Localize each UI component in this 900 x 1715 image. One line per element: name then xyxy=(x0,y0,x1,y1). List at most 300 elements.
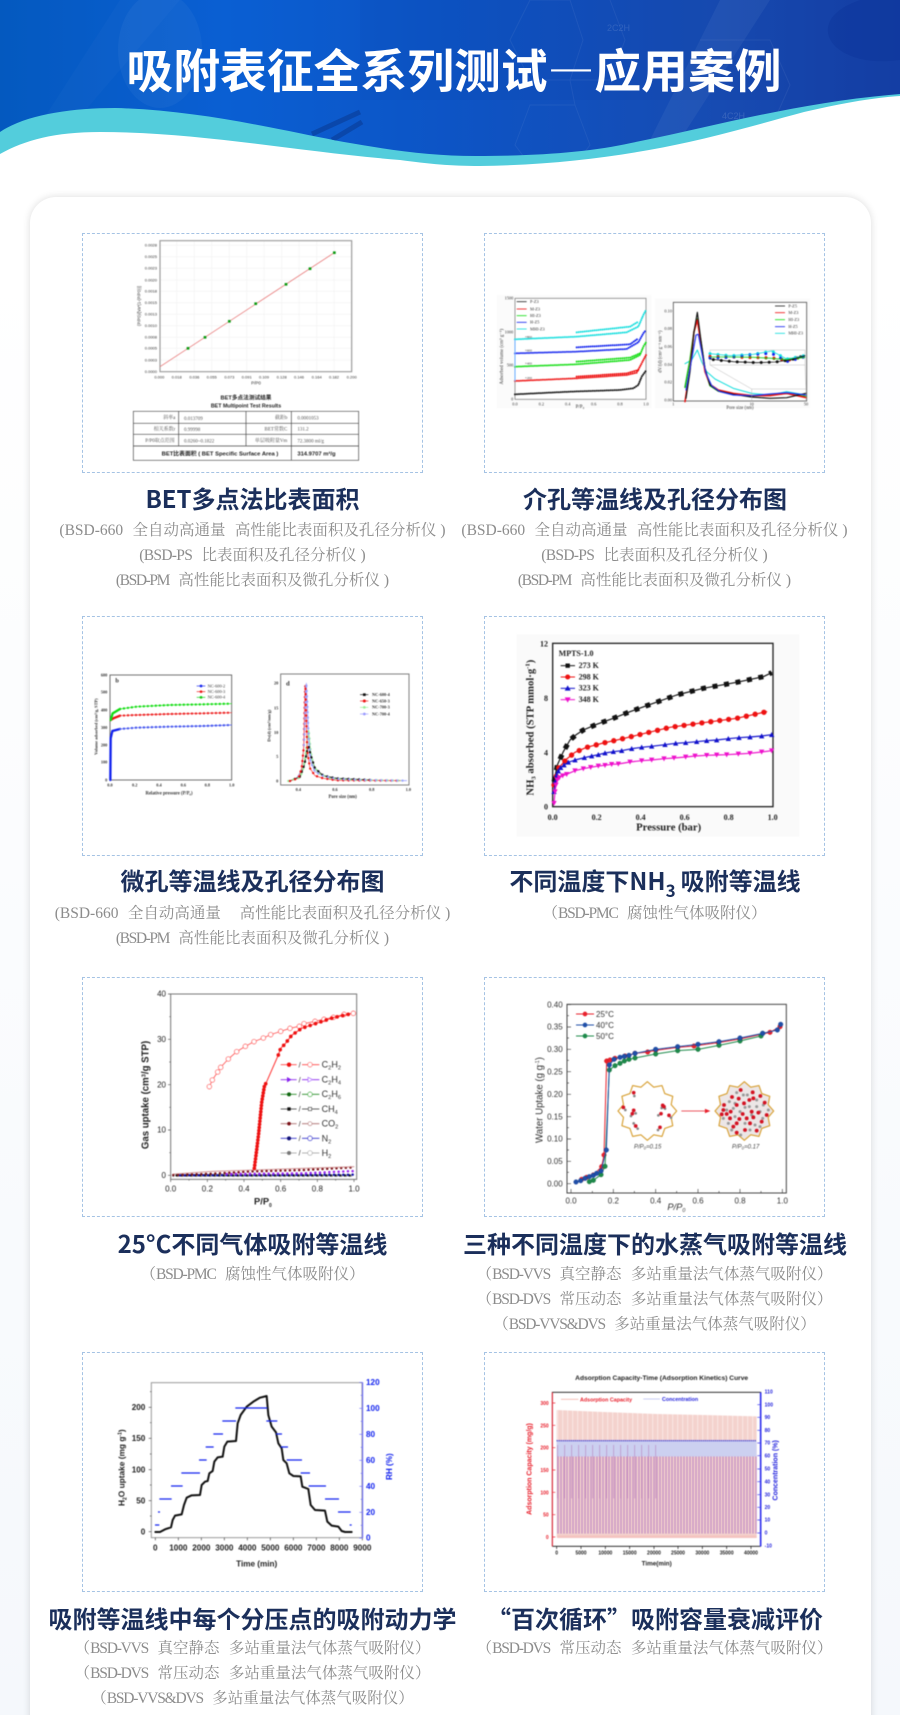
left labels and legend: 0 xyxy=(105,777,107,782)
axis labels: 0.20 xyxy=(547,1090,563,1099)
x axis labels: 5000 xyxy=(575,1550,587,1556)
legend: CO xyxy=(322,1119,335,1129)
NH3 labels: 0.8 xyxy=(724,813,734,822)
axis labels: 5000 xyxy=(261,1543,280,1552)
left axis labels: Adsorption Capacity (mg/g) xyxy=(526,1423,533,1515)
right chart labels and legend: 0.06 xyxy=(664,344,673,349)
right chart labels and legend: 1 xyxy=(672,401,674,406)
axis labels: 100 xyxy=(132,1465,146,1474)
axis labels: 0.8 xyxy=(312,1185,323,1194)
x axis labels: 15000 xyxy=(623,1550,637,1556)
axis labels: 0.2 xyxy=(608,1197,619,1206)
left legend: H-Z5 xyxy=(530,320,539,325)
right labels and legend: NC-600-4 xyxy=(372,692,391,697)
axis labels: 0.05 xyxy=(547,1157,563,1166)
right axis labels: 20 xyxy=(765,1505,770,1511)
right axis labels: 50 xyxy=(765,1467,770,1473)
right labels and legend: Dv(d) (cm³/nm/g) xyxy=(267,709,272,742)
chart: gas uptake at 25C xyxy=(140,990,360,1209)
right axis labels: 70 xyxy=(765,1441,770,1447)
right axis labels xyxy=(765,1390,779,1549)
NH3 labels: 0.6 xyxy=(680,813,690,822)
legend: 25°C xyxy=(596,1010,614,1019)
axis labels: 0.15 xyxy=(547,1112,563,1121)
instruments: mesopore: (BSD-PS 比表面积及孔径分析仪 ) xyxy=(541,547,768,564)
instruments: mesopore xyxy=(461,522,848,589)
RH axis labels: 60 xyxy=(366,1456,376,1465)
instruments: kinetics: （BSD-VVS 真空静态 多站重量法气体蒸气吸附仪） xyxy=(75,1640,430,1656)
axis labels: 0.25 xyxy=(547,1067,563,1076)
right chart labels and legend: 0.08 xyxy=(664,326,672,331)
axis labels: Time (min) xyxy=(236,1559,277,1568)
right chart labels and legend: dV/(d) (cm³ g⁻¹ nm⁻¹) xyxy=(657,330,663,373)
right axis labels: 10 xyxy=(765,1518,770,1524)
left chart labels: +400 xyxy=(525,362,532,366)
chart: BET line and results table xyxy=(132,240,360,462)
axis labels: 6000 xyxy=(284,1543,303,1552)
left labels and legend: 400 xyxy=(101,707,107,712)
title: gases: 25°C不同气体吸附等温线 xyxy=(118,1225,387,1260)
results table: 0.0260~0.1822 xyxy=(184,439,215,444)
axis labels: 0.0018 xyxy=(145,289,158,294)
left axis labels: 0 xyxy=(546,1535,549,1541)
legend xyxy=(281,1060,341,1160)
header banner with wave xyxy=(0,0,900,166)
left labels and legend: 300 xyxy=(101,725,107,730)
axis labels: 0 xyxy=(141,1527,146,1536)
axis labels: 4000 xyxy=(238,1543,257,1552)
axis labels: 20 xyxy=(157,1080,167,1089)
legend: C xyxy=(322,1060,328,1070)
instruments: hundred cycles: （BSD-DVS 常压动态 多站重量法气体蒸气吸附仪） xyxy=(477,1640,832,1656)
RH axis labels: 0 xyxy=(366,1534,371,1543)
panel: water vapour isotherm xyxy=(484,977,825,1217)
right labels and legend: 15 xyxy=(274,706,278,711)
axis labels: 0.091 xyxy=(242,374,252,379)
x axis labels: 25000 xyxy=(671,1550,685,1556)
title: water vapour: 三种不同温度下的水蒸气吸附等温线 xyxy=(463,1225,847,1260)
legend: 2 xyxy=(338,1066,341,1072)
legend: Adsorption Capacity xyxy=(580,1398,632,1404)
NH3 labels: 12 xyxy=(540,639,548,648)
low uptake gas curves xyxy=(173,1167,354,1176)
right labels and legend: 1.0 xyxy=(406,787,411,792)
results table: P/P0取点范围 xyxy=(145,437,175,444)
left labels and legend: NC-600-4 xyxy=(208,695,226,700)
chart: micropore isotherm and pore size xyxy=(93,672,412,800)
right labels and legend: NC-650-3 xyxy=(372,698,391,703)
left chart labels: +800 xyxy=(525,335,532,339)
legend: H xyxy=(331,1089,338,1099)
legend: 4 xyxy=(338,1080,341,1086)
left labels and legend: NC-600-3 xyxy=(208,689,225,694)
axis labels: 0.4 xyxy=(238,1185,250,1194)
instruments: micropore: (BSD-660 全自动高通量 高性能比表面积及孔径分析仪 ) xyxy=(55,904,450,922)
right chart labels and legend: Pore size (nm) xyxy=(726,406,754,411)
panel: gases at 25C xyxy=(82,977,423,1217)
legend: 2 xyxy=(328,1139,331,1145)
left chart labels: 0.4 xyxy=(565,401,571,406)
legend xyxy=(561,1397,698,1404)
panel: kinetics at each partial pressure xyxy=(82,1352,423,1592)
axis labels: 0.018 xyxy=(172,374,182,379)
axis labels: 0.182 xyxy=(329,374,340,379)
legend xyxy=(576,1010,614,1041)
x axis labels: Time(min) xyxy=(642,1561,672,1568)
axis labels: 0.200 xyxy=(347,374,357,379)
legend: / xyxy=(299,1060,302,1069)
right chart labels and legend xyxy=(657,303,808,411)
axis labels: 2 xyxy=(122,1497,128,1500)
axis labels: 0.0010 xyxy=(145,323,158,328)
left chart labels: 0.2 xyxy=(539,401,544,406)
pore inset after filling xyxy=(715,1082,774,1151)
axis labels: 0 xyxy=(682,1208,685,1214)
legend: 40°C xyxy=(596,1021,614,1030)
legend: 2 xyxy=(328,1154,331,1160)
NH3 labels xyxy=(524,639,778,834)
results table: 131.2 xyxy=(297,428,309,433)
right chart labels and legend: 0.02 xyxy=(664,380,672,385)
left legend xyxy=(517,299,545,331)
instruments: kinetics: （BSD-DVS 常压动态 多站重量法气体蒸气吸附仪） xyxy=(75,1665,430,1682)
NH3 labels: ) xyxy=(525,659,536,663)
axis labels: 0.073 xyxy=(224,374,235,379)
axis labels: 0.164 xyxy=(312,374,322,379)
legend: / xyxy=(299,1075,302,1084)
instruments: gases: （BSD-PMC 腐蚀性气体吸附仪） xyxy=(140,1266,365,1282)
instruments: NH3: （BSD-PMC 腐蚀性气体吸附仪） xyxy=(542,904,767,922)
axis labels: 0.146 xyxy=(294,374,305,379)
right chart labels and legend: 0.00 xyxy=(664,398,672,403)
left axis labels: 100 xyxy=(540,1490,549,1496)
axis labels: 1000 xyxy=(169,1543,188,1552)
right labels and legend: Pore size (nm) xyxy=(328,795,357,800)
right chart labels and legend: HI-Z3 xyxy=(788,317,799,322)
x axis labels: 35000 xyxy=(720,1550,734,1556)
instruments: kinetics: （BSD-VVS&DVS 多站重量法气体蒸气吸附仪） xyxy=(91,1690,414,1707)
right axis labels: 110 xyxy=(765,1390,773,1396)
left labels and legend xyxy=(93,672,234,797)
NH3 curves xyxy=(554,673,772,803)
RH axis labels: 80 xyxy=(366,1430,376,1439)
NH3 labels: 0.2 xyxy=(592,813,602,822)
arrow between insets xyxy=(681,1109,709,1113)
axis labels: 0.0015 xyxy=(145,300,158,305)
left chart labels xyxy=(499,296,649,410)
axis labels: 0.6 xyxy=(275,1185,287,1194)
NH3 labels: 0.4 xyxy=(636,813,646,822)
axis labels: 0.0000 xyxy=(145,369,158,374)
right axis labels: 80 xyxy=(765,1428,770,1434)
left chart labels: +200 xyxy=(525,376,532,380)
axis labels: 0.055 xyxy=(207,374,217,379)
pore inset before filling: P/P₀=0.15 xyxy=(634,1145,662,1151)
legend: / xyxy=(299,1119,302,1128)
axis labels: 7000 xyxy=(307,1543,326,1552)
RH steps xyxy=(155,1408,352,1525)
NH3 labels: NH xyxy=(525,780,536,796)
legend: 2 xyxy=(335,1125,338,1131)
axis labels: 0.6 xyxy=(692,1197,704,1206)
axis labels: ) xyxy=(117,1429,127,1432)
axis labels: 0.0020 xyxy=(145,277,158,282)
left axis labels: 250 xyxy=(540,1423,549,1429)
axis labels: 0.036 xyxy=(189,374,200,379)
panel: micropore isotherm and pore distribution xyxy=(82,616,423,856)
panel: hundred cycles xyxy=(484,1352,825,1592)
panel: NH3 isotherm xyxy=(484,616,825,856)
RH axis labels: 40 xyxy=(366,1482,376,1491)
axis labels: 1.0 xyxy=(348,1185,360,1194)
instruments: kinetics xyxy=(75,1640,430,1707)
results table: BET Multipoint Test Results xyxy=(211,403,281,409)
right labels and legend xyxy=(267,680,411,800)
NH3 legend xyxy=(559,649,600,704)
left legend: P-Z3 xyxy=(530,299,539,304)
axis labels: 3 xyxy=(141,1074,147,1077)
left axis labels: 300 xyxy=(540,1401,549,1407)
left labels and legend: 0.0 xyxy=(107,782,113,787)
right labels and legend: 0.6 xyxy=(332,787,339,792)
right labels and legend: NC-700-3 xyxy=(372,705,391,710)
left axis labels: 50 xyxy=(543,1513,549,1519)
NH3 legend: 298 K xyxy=(579,672,600,681)
left axis labels xyxy=(526,1401,549,1541)
right chart labels and legend: MHI-Z3 xyxy=(788,331,803,336)
axis labels: P/P0 xyxy=(251,380,261,385)
RH axis labels: 100 xyxy=(366,1404,380,1413)
legend: 4 xyxy=(335,1110,338,1116)
results table: 314.9707 m²/g xyxy=(297,451,336,458)
RH axis labels: 20 xyxy=(366,1508,376,1517)
right axis labels: 90 xyxy=(765,1415,770,1421)
chart: capacity fade over cycles xyxy=(525,1374,780,1568)
chart: NH3 adsorption xyxy=(524,639,778,834)
left chart labels: 1.0 xyxy=(643,401,649,406)
results table: 单层吸附量Vm xyxy=(255,437,287,444)
results table: 斜率a xyxy=(163,414,176,421)
right chart labels and legend: 50 xyxy=(804,401,808,406)
instruments: mesopore: (BSD-PM 高性能比表面积及微孔分析仪 ) xyxy=(518,572,791,589)
header banner with wave: 2C2H xyxy=(607,23,630,33)
axis labels: 30 xyxy=(157,1035,167,1044)
left labels and legend: 600 xyxy=(101,672,107,677)
legend: / xyxy=(299,1149,302,1158)
axis labels: 0.0028 xyxy=(145,243,158,248)
legend: / xyxy=(299,1105,302,1114)
NH3 labels: 1.0 xyxy=(768,813,778,822)
right labels and legend: NC-700-4 xyxy=(372,711,391,716)
instruments: BET: (BSD-PS 比表面积及孔径分析仪 ) xyxy=(139,547,366,564)
legend: C xyxy=(322,1074,328,1084)
axis labels: 0.0003 xyxy=(145,357,158,362)
results table: 相关系数r xyxy=(154,425,176,432)
left labels and legend: 0.4 xyxy=(156,782,163,787)
axis labels: 0.109 xyxy=(259,374,270,379)
axis labels: 0 xyxy=(162,1171,167,1180)
axis labels: 0.00 xyxy=(547,1179,563,1188)
left chart labels: +600 xyxy=(525,349,532,353)
chart: capacity fade over cycles: Adsorption Capacity-Time (Adsorption Kinetics) Curve xyxy=(575,1375,748,1382)
legend: 2 xyxy=(328,1080,331,1086)
RH axis labels xyxy=(366,1378,394,1543)
axis labels: 0.000 xyxy=(154,374,165,379)
title: hundred cycles: “百次循环”吸附容量衰减评价 xyxy=(487,1600,823,1634)
pore size curves xyxy=(685,312,806,402)
results table: 截距b xyxy=(275,414,288,421)
left axis labels: 150 xyxy=(540,1468,549,1474)
axis labels: Water Uptake (g g xyxy=(534,1065,545,1143)
right chart labels and legend: P-Z5 xyxy=(788,303,797,308)
results table: BET多点法测试结果 xyxy=(221,394,272,402)
NH3 legend: 273 K xyxy=(579,661,600,670)
right labels and legend: 5 xyxy=(276,754,278,759)
water uptake curves xyxy=(576,1024,781,1182)
right axis labels: 100 xyxy=(765,1402,773,1408)
left labels and legend: 200 xyxy=(101,742,107,747)
C2H2 curves xyxy=(209,1013,353,1168)
instruments: BET: (BSD-660 全自动高通量 高性能比表面积及孔径分析仪 ) xyxy=(59,522,446,538)
right chart labels and legend: 0.04 xyxy=(664,362,673,367)
axis labels: 200 xyxy=(132,1403,146,1412)
NH3 labels: absorbed (STP mmol·g xyxy=(525,668,536,776)
legend: 6 xyxy=(338,1095,341,1101)
x axis labels xyxy=(555,1550,758,1568)
left legend: MHI-Z3 xyxy=(530,326,545,331)
left labels and legend: 500 xyxy=(101,690,107,695)
axis labels xyxy=(117,1403,372,1568)
pore size inset xyxy=(710,350,805,365)
results table: BET常数C xyxy=(265,426,288,433)
axis labels: 0 xyxy=(269,1203,272,1209)
axis labels: 0 xyxy=(153,1543,158,1552)
panel: BET multipoint chart xyxy=(82,233,423,473)
axis labels: (P/P0)/[Va*(1-(P/P0))] xyxy=(137,286,142,326)
left labels and legend: NC-600-2 xyxy=(208,683,225,688)
title: BET: BET多点法比表面积 xyxy=(145,480,360,515)
right axis labels: 60 xyxy=(765,1453,770,1459)
axis labels xyxy=(534,1000,788,1214)
axis labels: 9000 xyxy=(353,1543,372,1552)
RH axis labels: 120 xyxy=(366,1378,380,1387)
NH3 labels: 4 xyxy=(544,748,548,757)
results table: BET比表面积 ( BET Specific Surface Area ) xyxy=(162,450,278,458)
title: NH3: 不同温度下NH3吸附等温线 xyxy=(509,862,801,902)
left chart labels: 1000 xyxy=(505,329,513,334)
pore inset after filling: P/P₀=0.17 xyxy=(732,1145,760,1151)
NH3 labels: 0 xyxy=(544,803,548,812)
right labels and legend: 0 xyxy=(276,778,278,783)
axis labels: 0.40 xyxy=(547,1000,563,1009)
legend: 50°C xyxy=(596,1032,614,1041)
axis labels: H xyxy=(117,1500,127,1506)
axis labels: 0.30 xyxy=(547,1045,563,1054)
axis labels: 0.0 xyxy=(165,1185,177,1194)
axis labels: 2000 xyxy=(192,1543,211,1552)
left labels and legend: Relative pressure (P/P₀) xyxy=(146,792,193,797)
axis labels: 0.10 xyxy=(547,1135,563,1144)
axis labels: 0.0013 xyxy=(145,312,158,317)
axis labels: 0.0023 xyxy=(145,266,158,271)
axis labels: 50 xyxy=(136,1496,146,1505)
right labels and legend: 20 xyxy=(274,681,278,686)
legend: CH xyxy=(322,1104,335,1114)
right labels and legend: 0.8 xyxy=(369,787,375,792)
right chart labels and legend: 0.10 xyxy=(664,308,672,313)
instruments: water vapour: （BSD-DVS 常压动态 多站重量法气体蒸气吸附仪） xyxy=(477,1291,832,1308)
results table: 0.99998 xyxy=(184,428,201,433)
instruments: BET: (BSD-PM 高性能比表面积及微孔分析仪 ) xyxy=(116,572,389,589)
right axis labels: Concentration (%) xyxy=(772,1440,779,1500)
axis labels: 8000 xyxy=(330,1543,349,1552)
left labels and legend: 100 xyxy=(101,760,107,765)
axis labels xyxy=(140,990,360,1209)
chart: water uptake xyxy=(534,1000,788,1214)
axis labels: 0.0008 xyxy=(145,335,158,340)
axis labels: 40 xyxy=(157,990,167,999)
axis labels: O uptake (mg g xyxy=(117,1437,127,1497)
axis labels: -1 xyxy=(118,1432,124,1437)
x axis labels: 30000 xyxy=(695,1550,710,1556)
axis labels: 3000 xyxy=(215,1543,234,1552)
title: mesopore: 介孔等温线及孔径分布图 xyxy=(523,480,787,515)
results table: 0.013709 xyxy=(184,417,203,422)
legend: H xyxy=(322,1148,328,1158)
legend: H xyxy=(331,1074,338,1084)
axis labels: 0.4 xyxy=(650,1197,662,1206)
instruments: micropore xyxy=(55,904,450,947)
chart: mesopore isotherm and pore size xyxy=(498,296,809,411)
NH3 legend: 348 K xyxy=(579,695,600,704)
right axis labels: 30 xyxy=(765,1492,770,1498)
right chart labels and legend: M-Z3 xyxy=(788,310,798,315)
left chart labels: 0.6 xyxy=(591,401,597,406)
axis labels: 0.0 xyxy=(565,1197,577,1206)
axis labels: ) xyxy=(534,1057,545,1060)
title: kinetics: 吸附等温线中每个分压点的吸附动力学 xyxy=(48,1600,456,1634)
axis labels: P/P xyxy=(667,1202,682,1212)
axis labels: 1.0 xyxy=(777,1197,788,1206)
cycling data bands xyxy=(557,1410,757,1538)
x axis labels: 20000 xyxy=(647,1550,661,1556)
panel: mesopore isotherm and pore distribution xyxy=(484,233,825,473)
axis labels: 0.35 xyxy=(547,1023,563,1032)
micropore isotherm curves xyxy=(110,704,232,780)
RH axis labels: RH (%) xyxy=(385,1453,394,1480)
instruments: water vapour: （BSD-VVS 真空静态 多站重量法气体蒸气吸附仪） xyxy=(477,1266,832,1282)
axis labels: 0.8 xyxy=(734,1197,746,1206)
axis labels: 150 xyxy=(132,1434,146,1443)
NH3 labels: 3 xyxy=(530,776,537,780)
axis labels xyxy=(137,243,357,385)
right labels and legend: d xyxy=(286,680,290,687)
title: micropore: 微孔等温线及孔径分布图 xyxy=(120,862,384,897)
x axis labels: 40000 xyxy=(744,1550,758,1556)
left chart labels: 0.0 xyxy=(512,401,518,406)
left chart labels: 500 xyxy=(507,363,513,368)
left labels and legend: 0.6 xyxy=(181,782,187,787)
chart: uptake and RH versus time xyxy=(116,1378,394,1569)
instruments: mesopore: (BSD-660 全自动高通量 高性能比表面积及孔径分析仪 ) xyxy=(461,522,848,538)
axis labels: 0.128 xyxy=(277,374,287,379)
instruments: water vapour: （BSD-VVS&DVS 多站重量法气体蒸气吸附仪） xyxy=(493,1316,816,1333)
header banner with wave: 4C2H xyxy=(722,111,745,121)
left labels and legend: Volume adsorbed (cm³/g, STP) xyxy=(93,698,98,755)
left chart labels: 0 xyxy=(511,397,513,402)
legend: / xyxy=(299,1134,302,1143)
left axis labels: 200 xyxy=(540,1446,549,1452)
